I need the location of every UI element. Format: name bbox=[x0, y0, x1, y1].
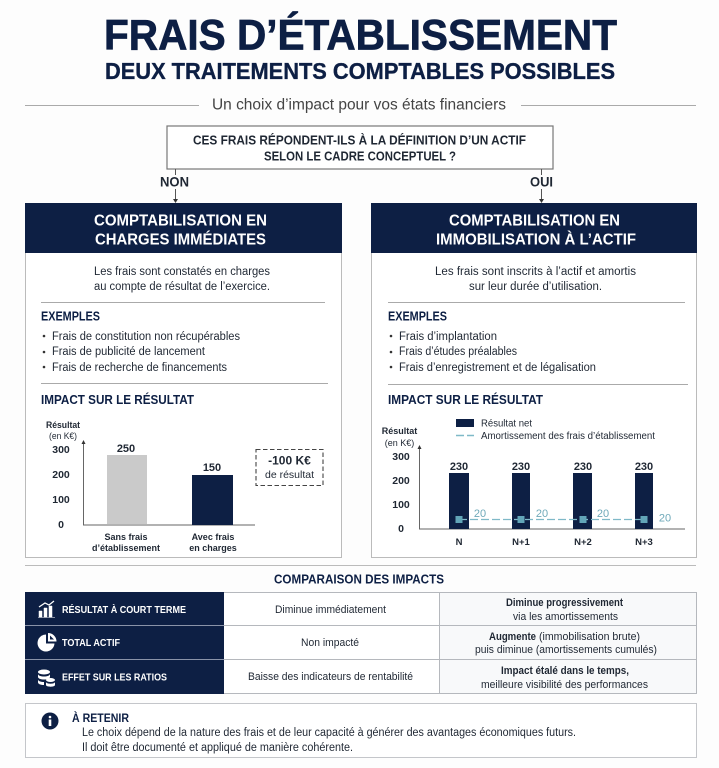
title: FRAIS D’ÉTABLISSEMENT bbox=[104, 12, 617, 60]
bar chart: one-off impact: 100 bbox=[52, 494, 70, 506]
bar chart: one-off impact: 300 bbox=[52, 444, 70, 456]
row: effet sur les ratios: Impact étalé dans le temps, bbox=[501, 665, 629, 677]
examples list: Frais de recherche de financements bbox=[52, 362, 227, 374]
icon: coins bbox=[38, 670, 55, 687]
examples list: EXEMPLES bbox=[388, 308, 447, 324]
comparison table bbox=[25, 592, 697, 694]
description: au compte de résultat de l’exercice. bbox=[94, 281, 270, 293]
examples list: Frais de publicité de lancement bbox=[52, 346, 206, 358]
row: résultat à court terme: via les amortissements bbox=[513, 611, 618, 623]
callout: -100 K€: -100 K€ bbox=[268, 454, 311, 468]
bar chart: spread impact: 20 bbox=[536, 508, 548, 520]
bar chart: spread impact: 20 bbox=[597, 508, 609, 520]
question box: CES FRAIS RÉPONDENT-ILS À LA DÉFINITION D’UN ACTIF bbox=[193, 132, 526, 148]
row: total actif: Augmente bbox=[489, 631, 536, 643]
bar chart: one-off impact: 0 bbox=[58, 519, 64, 531]
arrow: NON bbox=[160, 169, 189, 203]
impact heading: IMPACT SUR LE RÉSULTAT bbox=[388, 392, 543, 407]
callout: à retenir: Il doit être documenté et appliqué de manière cohérente. bbox=[82, 742, 353, 754]
row: total actif: (immobilisation brute) bbox=[539, 631, 640, 643]
legend: Amortissement des frais d’établissement bbox=[481, 431, 655, 442]
examples list: Frais d’études préalables bbox=[399, 346, 517, 358]
row: effet sur les ratios: EFFET SUR LES RATIOS bbox=[62, 672, 167, 684]
subtitle: DEUX TRAITEMENTS COMPTABLES POSSIBLES bbox=[105, 58, 615, 84]
row: total actif: Non impacté bbox=[301, 637, 359, 649]
bar chart: spread impact: 20 bbox=[474, 508, 486, 520]
bar chart: spread impact bbox=[382, 426, 685, 548]
bar chart: spread impact: 200 bbox=[392, 475, 410, 487]
bar chart: spread impact: 230 bbox=[512, 461, 530, 473]
bar chart: spread impact: 230 bbox=[635, 461, 653, 473]
bar chart: one-off impact bbox=[46, 420, 255, 553]
arrow: OUI bbox=[530, 169, 553, 203]
row: résultat à court terme: Diminue immédiatement bbox=[275, 604, 386, 616]
callout: -100 K€: de résultat bbox=[265, 469, 314, 481]
bar chart: spread impact: 0 bbox=[398, 523, 404, 535]
bar chart: one-off impact: 150 bbox=[203, 462, 221, 474]
bar chart: spread impact: N+2 bbox=[574, 537, 592, 548]
panel header: CHARGES IMMÉDIATES bbox=[95, 230, 266, 248]
description: sur leur durée d’utilisation. bbox=[469, 281, 602, 293]
bar chart: spread impact: N+3 bbox=[635, 537, 653, 548]
tagline: Un choix d’impact pour vos états financiers bbox=[212, 96, 506, 114]
bar chart: spread impact: N bbox=[456, 537, 463, 548]
icon: bar chart bbox=[38, 601, 55, 618]
impact heading: IMPACT SUR LE RÉSULTAT bbox=[41, 392, 194, 407]
icon: info bbox=[42, 712, 58, 730]
panel header bbox=[25, 203, 342, 253]
description bbox=[435, 266, 636, 293]
bar chart: one-off impact: Avec frais bbox=[192, 532, 234, 542]
examples list: Frais d’enregistrement et de légalisation bbox=[399, 362, 596, 374]
panel header: IMMOBILISATION À L’ACTIF bbox=[436, 230, 636, 248]
row: résultat à court terme: Diminue progressivement bbox=[506, 597, 623, 609]
bar chart: one-off impact: Résultat bbox=[46, 420, 80, 430]
question box: SELON LE CADRE CONCEPTUEL ? bbox=[264, 148, 456, 164]
panel header bbox=[371, 203, 697, 253]
row: total actif bbox=[38, 631, 657, 656]
bar chart: one-off impact: (en K€) bbox=[49, 431, 77, 441]
bar chart: one-off impact: en charges bbox=[189, 543, 237, 553]
bar chart: one-off impact: Sans frais bbox=[104, 532, 148, 542]
comparison heading: COMPARAISON DES IMPACTS bbox=[274, 572, 444, 586]
row: total actif: puis diminue (amortissements cumulés) bbox=[475, 644, 657, 656]
callout: à retenir bbox=[26, 704, 696, 758]
bar chart: spread impact: N+1 bbox=[512, 537, 531, 548]
bar chart: spread impact: (en K€) bbox=[385, 438, 414, 448]
bar chart: one-off impact: 200 bbox=[52, 469, 70, 481]
question box bbox=[167, 126, 553, 169]
row: résultat à court terme bbox=[38, 597, 623, 623]
bar chart: spread impact: 300 bbox=[392, 451, 410, 463]
panel: charges immédiates bbox=[25, 203, 342, 558]
examples list: EXEMPLES bbox=[41, 308, 100, 324]
examples list: Frais de constitution non récupérables bbox=[52, 331, 240, 343]
callout: -100 K€ bbox=[256, 450, 323, 486]
arrow: OUI: OUI bbox=[530, 174, 553, 190]
bar chart: spread impact: 230 bbox=[574, 461, 592, 473]
examples list bbox=[41, 308, 240, 374]
row: résultat à court terme: RÉSULTAT À COURT TERME bbox=[62, 603, 186, 616]
bar chart: spread impact: Résultat bbox=[382, 426, 417, 436]
row: effet sur les ratios: Baisse des indicateurs de rentabilité bbox=[248, 671, 413, 683]
legend bbox=[456, 418, 655, 442]
bar chart: one-off impact: 250 bbox=[117, 443, 135, 455]
panel: immobilisation à l'actif bbox=[371, 203, 697, 558]
legend: Résultat net bbox=[481, 418, 532, 430]
panel header: COMPTABILISATION EN bbox=[94, 212, 267, 230]
callout: à retenir: Le choix dépend de la nature des frais et de leur capacité à générer des avantages économiques futurs. bbox=[82, 727, 576, 739]
callout: à retenir: À RETENIR bbox=[72, 710, 129, 725]
row: effet sur les ratios: meilleure visibilité des performances bbox=[481, 679, 648, 691]
icon: pie chart bbox=[38, 633, 56, 652]
bar chart: spread impact: 230 bbox=[450, 461, 468, 473]
description bbox=[94, 266, 270, 293]
row: effet sur les ratios bbox=[38, 665, 648, 691]
description: Les frais sont constatés en charges bbox=[94, 266, 270, 278]
arrow: NON: NON bbox=[160, 174, 189, 190]
bar chart: spread impact: 100 bbox=[392, 499, 410, 511]
row: total actif: TOTAL ACTIF bbox=[62, 637, 120, 649]
description: Les frais sont inscrits à l’actif et amortis bbox=[435, 266, 636, 278]
examples list: Frais d’implantation bbox=[399, 331, 497, 343]
panel header: COMPTABILISATION EN bbox=[449, 212, 620, 230]
bar chart: one-off impact: d’établissement bbox=[92, 543, 160, 553]
bar chart: spread impact: 20 bbox=[659, 512, 671, 524]
examples list bbox=[388, 308, 596, 374]
